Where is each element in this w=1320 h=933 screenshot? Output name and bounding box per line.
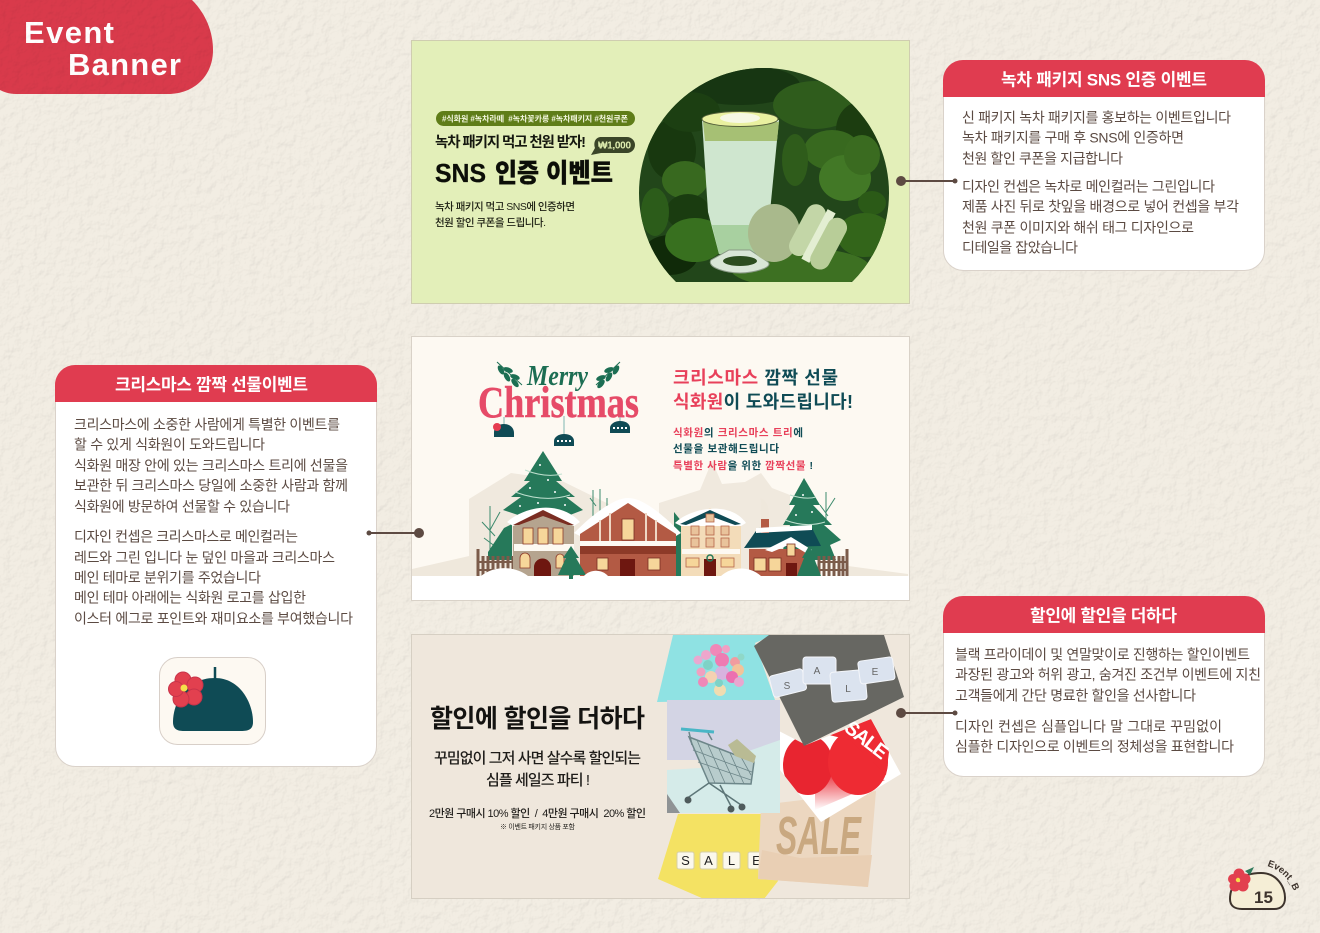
- price tiers: 2만원 구매시 10% 할인 / 4만원 구매시 20% 할인: [429, 806, 646, 820]
- main heading: 이벤트: [546, 158, 613, 188]
- card text: 디자인 컨셉은 녹차로 메인컬러는 그린입니다: [962, 178, 1215, 194]
- card text: 블랙 프라이데이 및 연말맞이로 진행하는 할인이벤트: [955, 646, 1250, 662]
- title tab: Event Banner: Banner: [68, 47, 181, 82]
- description: 식화원의 크리스마스 트리에: [673, 426, 803, 439]
- card text: 천원 할인 쿠폰을 지급합니다: [962, 150, 1123, 166]
- card text: 디자인 컨셉은 크리스마스로 메인컬러는: [74, 528, 298, 544]
- title tab: Event Banner: Event: [24, 15, 114, 50]
- page number badge: [1228, 860, 1299, 910]
- page number badge: 15: [1254, 888, 1273, 907]
- photo: red SALE balloons: SALE: [840, 717, 892, 764]
- card text: 디테일을 잡았습니다: [962, 240, 1078, 256]
- photo: yellow SALE tiles: A: [704, 853, 713, 868]
- card text: 이스터 에그로 포인트와 재미요소를 부여했습니다: [74, 610, 353, 626]
- photo: yellow SALE tiles: E: [752, 853, 761, 868]
- card text: 할 수 있게 식화원이 도와드립니다: [74, 436, 265, 452]
- price bubble: [591, 137, 635, 155]
- card text: 보관한 뒤 크리스마스 당일에 소중한 사람과 함께: [74, 478, 348, 494]
- description: 특별한 사람을 위한 깜짝선물 !: [673, 459, 813, 472]
- description: [673, 426, 813, 472]
- village illustration: [412, 451, 909, 600]
- photo: cart with money: [667, 700, 780, 813]
- photo: SALE keys on gray: L: [845, 684, 851, 695]
- fence: [478, 549, 847, 576]
- photo collage: [657, 635, 904, 899]
- photo: yellow SALE tiles: S: [681, 853, 690, 868]
- connector: discount: [896, 708, 958, 718]
- callout card: Christmas gift event: [55, 365, 377, 766]
- heading: 식화원이 도와드립니다!: [673, 392, 853, 412]
- description: 꾸밈없이 그저 사면 살수록 할인되는: [434, 750, 641, 767]
- photo: SALE keys on gray: [754, 635, 904, 746]
- card text: [955, 646, 1261, 754]
- description: 천원 할인 쿠폰을 드립니다.: [435, 216, 546, 229]
- banner: discount on discount: [412, 634, 910, 899]
- house 3: [681, 508, 741, 576]
- connector: green tea: [896, 176, 958, 186]
- card text: 신 패키지 녹차 패키지를 홍보하는 이벤트입니다: [962, 110, 1231, 126]
- banner: green tea SNS event: [412, 40, 910, 304]
- main heading: SNS: [435, 158, 486, 188]
- callout card: discount: 할인에 할인을 더하다: [1030, 606, 1177, 626]
- heading: [673, 368, 853, 412]
- trees: [488, 524, 512, 560]
- Merry Christmas lettering: Christmas: [478, 378, 639, 427]
- photo: yellow SALE tiles: [658, 814, 778, 899]
- description: 심플 세일즈 파티 !: [486, 772, 590, 789]
- card text: [74, 416, 353, 626]
- hashtag pill: #식화원 #녹차라떼 #녹차꽃카롱 #녹차패키지 #천원쿠폰: [442, 114, 629, 124]
- photo: matcha latte and macarons on leaves: [639, 68, 889, 282]
- card text: 고객들에게 간단 명료한 할인을 선사합니다: [955, 688, 1196, 704]
- Merry Christmas lettering: Merry: [526, 361, 588, 392]
- connector: Christmas: [366, 528, 424, 538]
- photo: pink balloons on cyan: [657, 635, 775, 702]
- photo: SALE keys on gray: A: [814, 666, 821, 677]
- callout card: green tea SNS event: [943, 60, 1265, 270]
- callout card: Christmas gift event: 크리스마스 깜짝 선물이벤트: [115, 376, 308, 394]
- banner: Christmas gift event: [412, 336, 910, 600]
- card text: 식화원에 방문하여 선물할 수 있습니다: [74, 498, 290, 514]
- small trees: [558, 546, 821, 579]
- card text: 식화원 매장 안에 있는 크리스마스 트리에 선물을: [74, 458, 348, 474]
- house 2: [574, 498, 681, 536]
- house 4: [744, 526, 821, 548]
- card text: 레드와 그린 입니다 눈 덮인 마을과 크리스마스: [74, 550, 335, 566]
- price bubble: ₩1,000: [598, 140, 631, 152]
- Merry Christmas lettering: [478, 361, 639, 427]
- subheading: 녹차 패키지 먹고 천원 받자!: [435, 134, 586, 151]
- callout card: discount: [943, 596, 1265, 776]
- hanging ornaments: [493, 416, 630, 446]
- photo: beige 3D SALE: [758, 791, 876, 887]
- card text: 크리스마스에 소중한 사람에게 특별한 이벤트를: [74, 416, 340, 432]
- card text: 녹차 패키지를 구매 후 SNS에 인증하면: [962, 130, 1184, 146]
- macarons: [748, 204, 800, 262]
- main heading: [435, 158, 613, 188]
- photo: SALE keys on gray: S: [784, 681, 791, 692]
- card text: 메인 테마로 분위기를 주었습니다: [74, 570, 261, 586]
- page number badge: Event_B: [1268, 860, 1299, 890]
- footnote: ※ 이벤트 패키지 상품 포함: [500, 822, 576, 831]
- hashtag pill: [436, 111, 635, 126]
- main heading: 인증: [495, 158, 539, 188]
- heading: 크리스마스 깜짝 선물: [673, 368, 838, 388]
- photo: yellow SALE tiles: L: [728, 853, 735, 868]
- heading: 할인에 할인을 더하다: [430, 705, 645, 733]
- card text: 천원 쿠폰 이미지와 해쉬 태그 디자인으로: [962, 220, 1194, 236]
- title tab: Event Banner: [0, 0, 213, 94]
- card text: 심플한 디자인으로 이벤트의 정체성을 표현합니다: [955, 738, 1234, 754]
- card text: 제품 사진 뒤로 찻잎을 배경으로 넣어 컨셉을 부각: [962, 198, 1239, 214]
- card text: [962, 110, 1239, 256]
- description: 선물을 보관해드립니다: [673, 442, 779, 455]
- description: 녹차 패키지 먹고 SNS에 인증하면: [435, 200, 575, 213]
- card text: 메인 테마 아래에는 식화원 로고를 삽입한: [74, 590, 306, 606]
- background village silhouette: [469, 461, 790, 576]
- card text: 디자인 컨셉은 심플입니다 말 그대로 꾸밈없이: [955, 718, 1222, 734]
- description: [435, 200, 575, 229]
- bare trees: [482, 489, 835, 552]
- photo: red SALE balloons: [779, 717, 901, 822]
- card text: 과장된 광고와 허위 광고, 숨겨진 조건부 이벤트에 지친: [955, 666, 1261, 682]
- house 1: [513, 508, 574, 576]
- photo: SALE keys on gray: E: [872, 667, 879, 678]
- snow mounds: [481, 568, 761, 576]
- glass: [702, 120, 779, 254]
- description: [434, 750, 641, 789]
- photo: beige 3D SALE: SALE: [776, 806, 862, 866]
- callout card: green tea SNS event: 녹차 패키지 SNS 인증 이벤트: [1001, 70, 1207, 90]
- icon: logo tile: [160, 658, 266, 744]
